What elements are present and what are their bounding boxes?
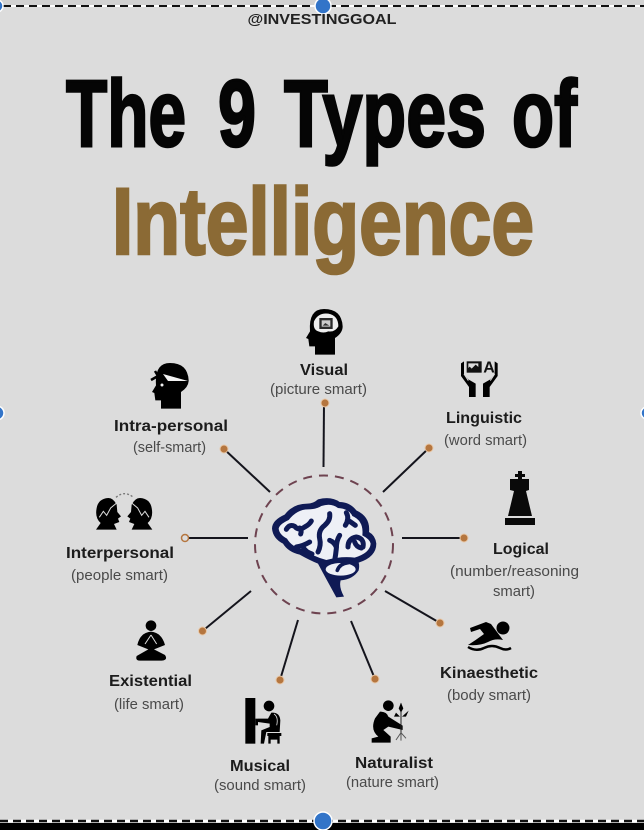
icon: swimmer xyxy=(468,622,511,650)
Musical xyxy=(214,698,306,794)
Naturalist xyxy=(346,700,439,791)
sublabel: picture smart: (picture smart) xyxy=(270,381,367,398)
icon: two heads facing each other xyxy=(96,494,152,530)
label: Existential: Existential xyxy=(109,673,192,690)
icon: pianist at piano xyxy=(245,698,281,744)
sublabel: sound smart: (sound smart) xyxy=(214,777,306,794)
sublabel: word smart: (word smart) xyxy=(444,432,527,449)
selection frame: bottom edge xyxy=(0,821,644,830)
sublabel: life smart: (life smart) xyxy=(114,696,184,713)
icon: intra-personal head xyxy=(151,363,189,409)
icon: hands holding picture and letter: A xyxy=(483,360,495,377)
Intra-personal xyxy=(114,363,228,456)
label: Intra-personal: Intra-personal xyxy=(114,418,228,435)
title: The xyxy=(66,61,186,167)
Logical xyxy=(450,471,579,600)
icon: person planting xyxy=(372,700,409,743)
label: Musical: Musical xyxy=(230,758,290,775)
handle text: @INVESTINGGOAL xyxy=(248,11,396,28)
Visual xyxy=(270,309,367,398)
label: Interpersonal: Interpersonal xyxy=(66,545,174,562)
sublabel: number/reasoning smart: (number/reasoning xyxy=(450,563,579,580)
sublabel: self-smart: (self-smart) xyxy=(133,439,206,456)
title: Intelligence xyxy=(112,169,534,275)
label: Kinaesthetic: Kinaesthetic xyxy=(440,665,538,682)
Kinaesthetic xyxy=(440,622,538,704)
icon: brain xyxy=(272,498,376,597)
Linguistic xyxy=(444,360,527,449)
icon: meditating figure xyxy=(136,620,166,661)
title: 9 xyxy=(218,61,256,167)
icon: chess king xyxy=(505,471,535,525)
sublabel: body smart: (body smart) xyxy=(447,687,531,704)
title: Types xyxy=(284,61,486,167)
title: of xyxy=(512,61,577,167)
label: Logical: Logical xyxy=(493,541,549,558)
Interpersonal xyxy=(66,494,174,584)
connector lines and dots xyxy=(182,399,468,684)
label: Linguistic: Linguistic xyxy=(446,410,522,427)
dashed circle around brain xyxy=(255,476,393,614)
sublabel: people smart: (people smart) xyxy=(71,567,168,584)
Existential xyxy=(109,620,192,713)
label: Naturalist: Naturalist xyxy=(355,755,434,772)
label: Visual: Visual xyxy=(300,362,348,379)
sublabel: nature smart: (nature smart) xyxy=(346,774,439,791)
selection frame: top edge xyxy=(0,5,644,7)
Logical: smart) xyxy=(493,583,535,600)
title xyxy=(66,61,577,275)
icon: visual head xyxy=(306,309,343,355)
